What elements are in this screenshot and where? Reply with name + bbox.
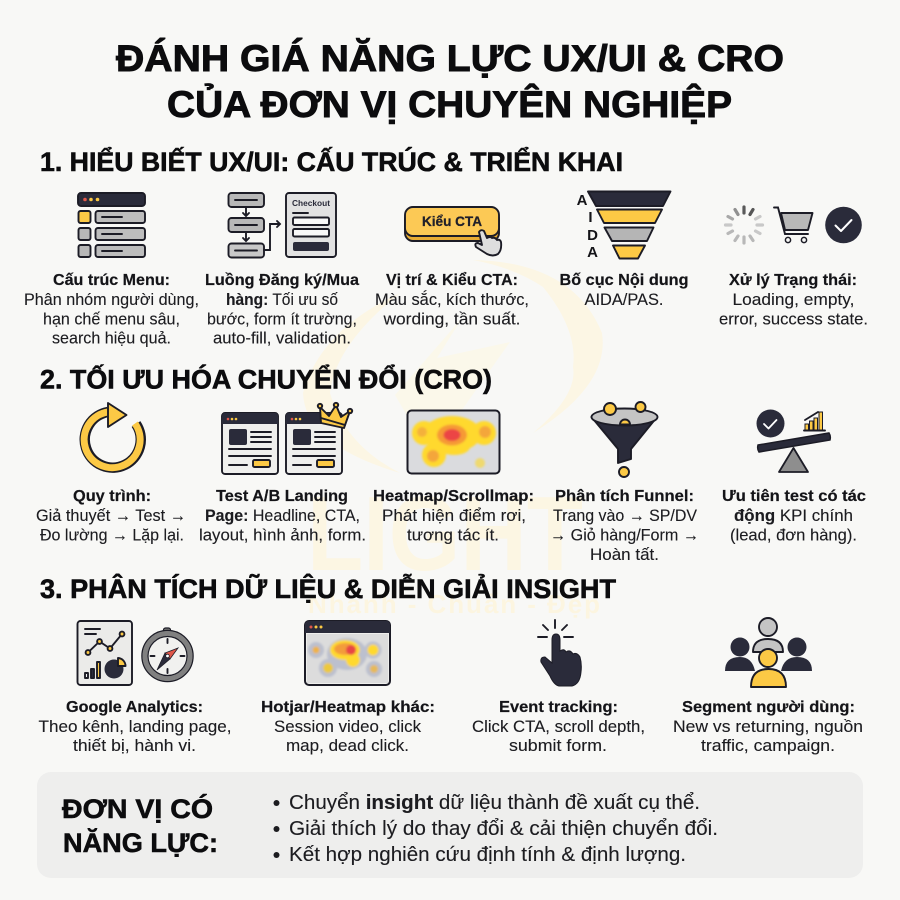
- title: ĐÁNH GIÁ NĂNG LỰC UX/UI & CRO: [116, 38, 784, 79]
- icon: A/B landing pages: [222, 403, 352, 474]
- text: Hotjar: Hotjar/Heatmap khác:: [261, 699, 435, 716]
- text: menu structure: hạn chế menu sâu,: [43, 310, 180, 328]
- icon: user segments: [725, 618, 812, 687]
- heading: section 1: 1. HIỂU BIẾT UX/UI: CẤU TRÚC & TRIỂN KHAI: [40, 146, 623, 177]
- text: state handling: error, success state.: [719, 310, 868, 328]
- icon: CTA button: [405, 207, 501, 256]
- conclusion bullet list: Kết hợp nghiên cứu định tính & định lượng.: [289, 844, 686, 866]
- text: priority test: [722, 488, 866, 544]
- text: state handling: [719, 272, 868, 328]
- icon: AIDA funnel: A: [587, 244, 598, 261]
- text: process: Quy trình:: [73, 488, 151, 505]
- text: funnel: Trang vào → SP/DV: [553, 507, 697, 525]
- text: process: Đo lường → Lặp lại.: [40, 526, 184, 544]
- text: A/B test: Test A/B Landing: [216, 488, 348, 505]
- conclusion bullet list: Chuyển insight dữ liệu thành đề xuất cụ thể.: [289, 792, 700, 814]
- text: state handling: Loading, empty,: [732, 291, 854, 309]
- text: priority test: (lead, đơn hàng).: [730, 526, 857, 544]
- text: priority test: Ưu tiên test có tác: [722, 488, 866, 505]
- text: menu structure: search hiệu quả.: [52, 330, 171, 348]
- text: Google Analytics: Google Analytics:: [66, 699, 203, 716]
- conclusion bullet list: [274, 792, 718, 866]
- text: event tracking: [472, 699, 645, 755]
- text: process: Giả thuyết → Test →: [36, 507, 186, 525]
- text: Google Analytics: [38, 699, 232, 755]
- text: checkout flow: hàng: Tối ưu số: [226, 291, 338, 309]
- watermark: LIGHT logo: LIGHT: [307, 475, 583, 593]
- text: heatmap: Heatmap/Scrollmap:: [373, 488, 534, 505]
- panel: conclusion: [37, 772, 863, 878]
- text: checkout flow: [205, 272, 359, 348]
- text: CTA: Màu sắc, kích thước,: [375, 290, 529, 309]
- icon: funnel: [592, 402, 658, 477]
- icon: menu structure: [78, 193, 145, 257]
- text: menu structure: Cấu trúc Menu:: [53, 272, 170, 289]
- text: event tracking: submit form.: [509, 737, 607, 755]
- text: user segments: [673, 699, 863, 755]
- text: content layout: AIDA/PAS.: [584, 291, 664, 309]
- text: funnel: Hoàn tất.: [590, 546, 659, 564]
- text: Hotjar: Session video, click: [274, 718, 422, 736]
- text: menu structure: Phân nhóm người dùng,: [24, 291, 199, 309]
- icon: Hotjar heatmap window: [305, 621, 390, 685]
- section 1: UX/UI: [24, 146, 868, 348]
- text: CTA: Vị trí & Kiểu CTA:: [386, 271, 518, 289]
- text: A/B test: [199, 488, 366, 544]
- text: content layout: Bố cục Nội dung: [560, 272, 688, 289]
- text: user segments: New vs returning, nguồn: [673, 718, 863, 736]
- icon: state handling: [726, 207, 862, 243]
- text: content layout: [560, 272, 688, 309]
- text: checkout flow: auto-fill, validation.: [213, 330, 351, 348]
- text: Google Analytics: thiết bị, hành vi.: [73, 737, 196, 755]
- text: heatmap: Phát hiện điểm rơi,: [382, 507, 526, 525]
- icon: AIDA funnel: [577, 192, 670, 261]
- text: checkout flow: Luồng Đăng ký/Mua: [205, 272, 359, 289]
- icon: process cycle arrow: [84, 403, 141, 468]
- watermark: LIGHT logo: [303, 260, 603, 619]
- watermark: LIGHT logo: Nhanh - Chuẩn - Đẹp: [308, 589, 600, 619]
- text: funnel: Phân tích Funnel:: [555, 488, 694, 505]
- text: Google Analytics: Theo kênh, landing page,: [38, 718, 232, 736]
- text: Hotjar: [261, 699, 435, 755]
- section 2: CRO: [36, 362, 866, 564]
- icon: priority balance: [756, 410, 830, 472]
- text: CTA: [375, 271, 529, 328]
- icon: pointing hand click: [538, 620, 581, 686]
- text: process: [36, 488, 186, 544]
- icon: CTA button: Kiểu CTA: [422, 214, 482, 229]
- conclusion heading: NĂNG LỰC:: [63, 827, 218, 858]
- icon: analytics dashboard and compass: [78, 621, 193, 685]
- text: user segments: traffic, campaign.: [701, 737, 835, 755]
- text: Hotjar: map, dead click.: [286, 737, 409, 755]
- text: user segments: Segment người dùng:: [682, 699, 855, 716]
- text: checkout flow: bước, form ít trường,: [207, 310, 357, 328]
- icon: checkout flow: [228, 193, 336, 258]
- icon: checkout flow: Checkout: [292, 198, 330, 208]
- text: funnel: → Giỏ hàng/Form →: [550, 526, 699, 544]
- icon: AIDA funnel: A: [577, 192, 588, 209]
- text: event tracking: Event tracking:: [499, 699, 618, 716]
- section 3: data: [38, 572, 863, 755]
- text: funnel: [550, 488, 699, 564]
- text: event tracking: Click CTA, scroll depth,: [472, 718, 645, 736]
- heading: section 3: 3. PHÂN TÍCH DỮ LIỆU & DIỄN GIẢI INSIGHT: [40, 572, 617, 604]
- icon: AIDA funnel: D: [587, 227, 598, 244]
- text: CTA: wording, tần suất.: [382, 310, 520, 328]
- conclusion heading: ĐƠN VỊ CÓ: [62, 793, 213, 824]
- title: CỦA ĐƠN VỊ CHUYÊN NGHIỆP: [167, 83, 732, 125]
- icon: heatmap: [408, 410, 500, 474]
- conclusion heading: [62, 793, 218, 858]
- text: menu structure: [24, 272, 199, 348]
- text: heatmap: [373, 488, 534, 544]
- conclusion bullet list: Giải thích lý do thay đổi & cải thiện chuyển đổi.: [289, 818, 718, 840]
- heading: section 2: 2. TỐI ƯU HÓA CHUYỂN ĐỔI (CRO): [40, 362, 492, 394]
- icon: AIDA funnel: I: [588, 209, 593, 226]
- text: A/B test: layout, hình ảnh, form.: [199, 526, 366, 544]
- text: state handling: Xử lý Trạng thái:: [729, 272, 857, 289]
- text: heatmap: tương tác ít.: [407, 526, 499, 544]
- text: priority test: động KPI chính: [734, 507, 853, 525]
- text: A/B test: Page: Headline, CTA,: [205, 507, 360, 525]
- title: [116, 38, 784, 125]
